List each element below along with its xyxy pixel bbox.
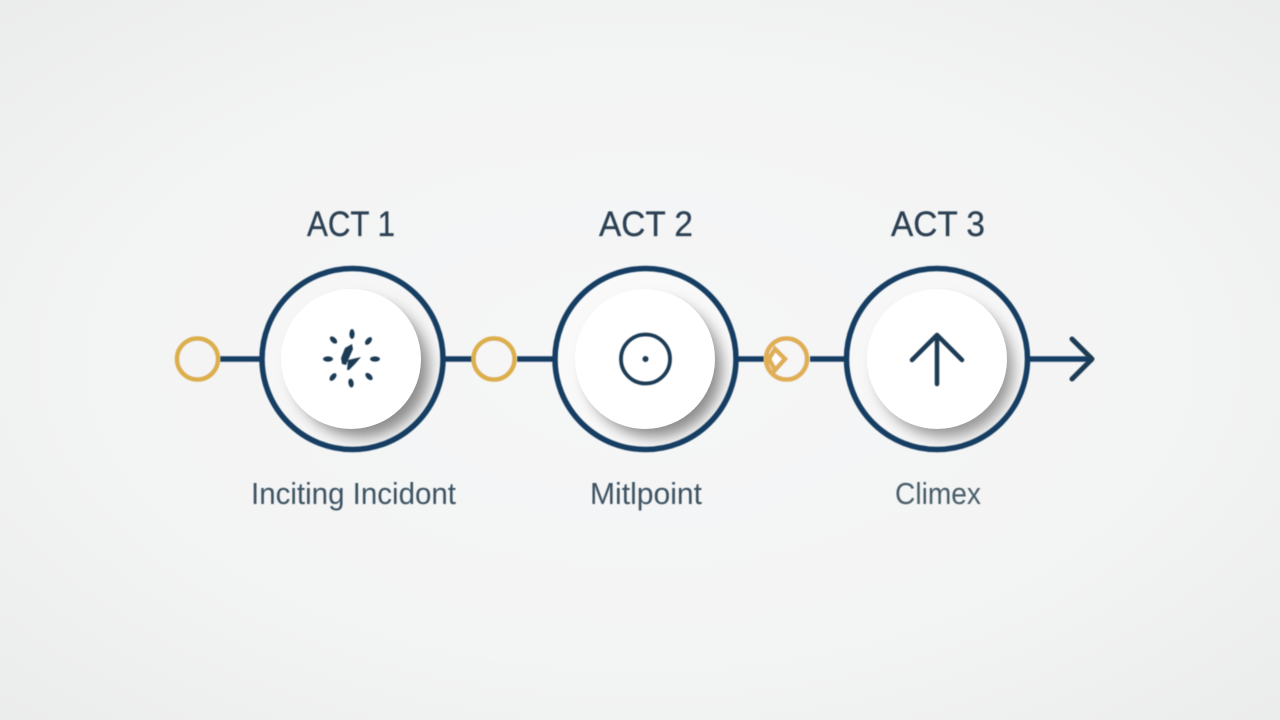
act 1 node [262,268,443,450]
heading: ACT 1: ACT 1 [307,205,395,244]
act 2 node [555,268,736,450]
timeline connector line [220,356,1092,362]
icon: up arrow [912,335,962,384]
arrow head [1072,339,1092,379]
icon: spark burst [323,329,380,388]
milestone ring 3 with chevron [766,338,807,380]
act 3 node [846,268,1028,450]
label: Inciting Incident: Inciting Incidont [251,476,456,511]
heading: ACT 3: ACT 3 [891,205,985,244]
label: Midpoint: Mitlpoint [590,476,702,511]
milestone ring 1 [177,338,218,380]
milestone ring 2 [474,338,514,380]
icon: target circle [621,334,670,384]
heading: ACT 2: ACT 2 [599,205,693,244]
label: Climax: Climex [895,476,981,511]
